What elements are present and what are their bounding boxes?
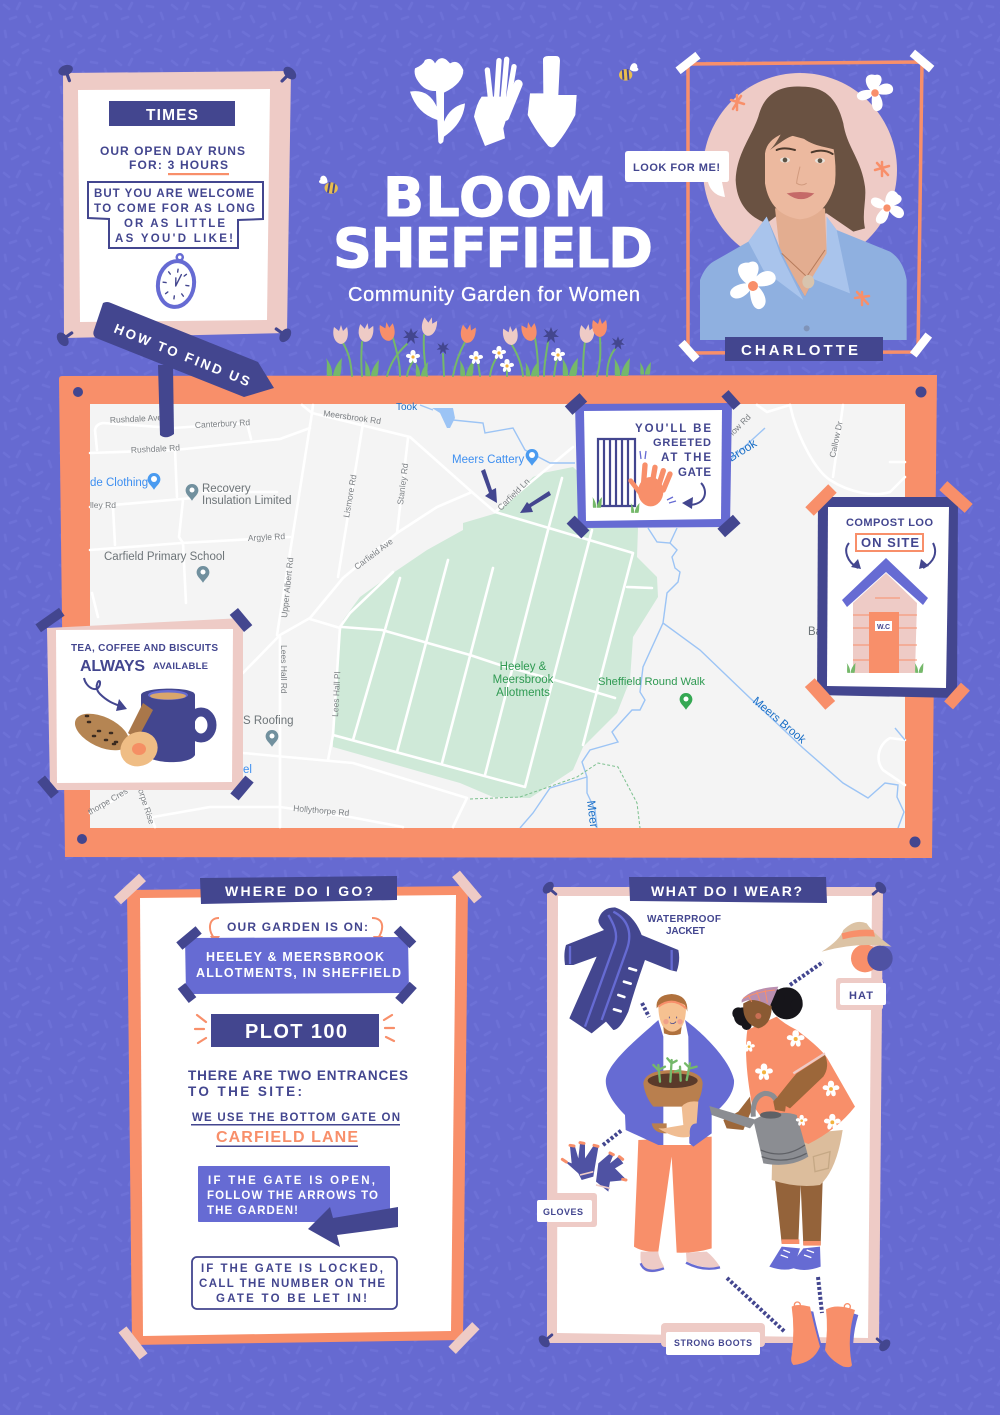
dotted connectors <box>603 962 823 1332</box>
icon: biscuits <box>69 703 163 772</box>
icon: stopwatch <box>155 252 198 309</box>
title: SHEFFIELD <box>333 217 653 280</box>
icon: jacket <box>564 907 679 1033</box>
map: labels: S Roofing <box>243 715 294 727</box>
label: hat <box>836 978 886 1010</box>
panel: portrait <box>625 50 934 362</box>
signpost: how to find us: HOW TO FIND US <box>112 321 252 389</box>
gate locked box: IF THE GATE IS LOCKED, <box>201 1263 383 1275</box>
map: labels: Lees Hall Pl <box>330 671 342 717</box>
arrow <box>308 1207 398 1247</box>
label: waterproof jacket: JACKET <box>666 926 705 937</box>
name label: CHARLOTTE <box>741 342 858 359</box>
illustration: man with pot <box>606 994 734 1272</box>
icon: curly arrow <box>84 678 127 711</box>
garden is on: OUR GARDEN IS ON: <box>227 920 368 934</box>
title: BLOOM <box>383 166 607 229</box>
card: compost loo <box>805 481 973 710</box>
speech bubble <box>625 151 729 197</box>
label: strong boots: STRONG BOOTS <box>674 1338 752 1348</box>
bottom gate text: CARFIELD LANE <box>216 1129 358 1146</box>
map: labels: Heeley & <box>500 661 547 673</box>
two entrances text <box>188 1068 408 1099</box>
icon: mug <box>141 689 212 762</box>
map: labels: Took <box>396 402 418 413</box>
biscuit text <box>71 643 218 675</box>
map: labels: Argyle Rd <box>248 531 286 543</box>
map: labels: Carfield Primary School <box>104 551 225 563</box>
map: labels: Allotments <box>496 687 550 699</box>
address box: ALLOTMENTS, IN SHEFFIELD <box>196 966 401 980</box>
flower border <box>326 315 651 376</box>
gate text: YOU'LL BE <box>635 423 711 435</box>
gate text: GATE <box>678 467 711 479</box>
title icons: flower, hand, trowel <box>410 56 577 147</box>
card: gate <box>565 390 741 538</box>
times heading: TIMES <box>146 107 198 124</box>
map: labels: thorpe Cres <box>86 786 129 817</box>
label: gloves <box>537 1193 597 1227</box>
open day text <box>100 144 245 175</box>
plot label: PLOT 100 <box>245 1021 347 1043</box>
map: labels: low Rd <box>727 412 753 437</box>
two entrances text: TO THE SITE: <box>188 1084 302 1099</box>
icon: waving hand <box>631 465 670 506</box>
panel: times <box>54 63 299 348</box>
map: labels: Insulation Limited <box>202 495 292 507</box>
icon: hat <box>822 922 893 972</box>
map: labels: de Clothing <box>90 477 148 489</box>
gate open box: THE GARDEN! <box>207 1205 298 1217</box>
gate locked box <box>192 1257 397 1309</box>
gate locked box: CALL THE NUMBER ON THE <box>199 1278 385 1290</box>
bottom gate text <box>191 1112 400 1147</box>
map: labels: Meersbrook <box>493 674 554 686</box>
tape corners <box>176 926 417 1004</box>
tape corners <box>114 871 482 1360</box>
icon: arrows <box>846 543 935 569</box>
arrows on map <box>481 469 551 513</box>
pins <box>536 880 893 1353</box>
biscuit text: TEA, COFFEE AND BISCUITS <box>71 643 218 654</box>
map: labels <box>86 402 845 829</box>
gate locked box: GATE TO BE LET IN! <box>216 1293 367 1305</box>
icon: pins <box>54 63 299 348</box>
tape corners <box>805 481 973 710</box>
label: gloves: GLOVES <box>543 1207 583 1217</box>
map: labels: Recovery <box>202 483 251 495</box>
map: labels: Rushdale Rd <box>131 442 180 455</box>
panel: map board <box>59 375 937 858</box>
ticks and grass <box>592 451 676 513</box>
heading: WHAT DO I WEAR? <box>651 883 802 899</box>
tape corners <box>675 50 934 362</box>
signpost: how to find us <box>93 302 274 437</box>
icon: gate <box>598 439 635 506</box>
icon: bees <box>315 62 641 198</box>
map: labels: el <box>243 764 252 776</box>
map: labels: Canterbury Rd <box>195 417 251 430</box>
map: labels: Brook <box>725 436 760 465</box>
map: labels: Meersbrook Rd <box>323 408 382 426</box>
decorative nails <box>73 386 926 848</box>
loo text: COMPOST LOO <box>846 517 933 529</box>
map: streams <box>420 405 905 828</box>
illustration: woman with watering can <box>709 987 855 1270</box>
card: tea and biscuits <box>35 608 254 800</box>
plot label <box>195 1014 394 1047</box>
map: labels: Carfield Ave <box>352 536 395 572</box>
photo: charlotte <box>700 87 907 340</box>
subtitle: Community Garden for Women <box>348 284 640 306</box>
speech bubble: LOOK FOR ME! <box>633 162 720 174</box>
heading <box>629 877 827 903</box>
welcome box <box>88 182 263 248</box>
label: waterproof jacket <box>647 914 721 937</box>
panel: where do i go <box>114 871 482 1360</box>
map: labels: Ba <box>808 626 823 638</box>
map: labels: Upper Albert Rd <box>279 557 295 618</box>
label: waterproof jacket: WATERPROOF <box>647 914 721 925</box>
map: labels: Callow Dr <box>827 420 845 458</box>
welcome box: TO COME FOR AS LONG <box>94 203 255 215</box>
bottom gate text: WE USE THE BOTTOM GATE ON <box>192 1112 400 1124</box>
icon: shed <box>842 558 928 673</box>
icon: shed: W.C <box>877 624 890 631</box>
icon: boots <box>791 1302 858 1372</box>
illustration group <box>562 907 893 1372</box>
welcome box: BUT YOU ARE WELCOME <box>94 188 254 200</box>
map: labels: Meers Brook <box>750 695 808 746</box>
biscuit text: AVAILABLE <box>153 661 208 672</box>
gate open box: FOLLOW THE ARROWS TO <box>207 1190 378 1202</box>
map: allotments area <box>333 467 658 798</box>
map: location pins <box>148 449 692 747</box>
label: hat: HAT <box>849 990 873 1002</box>
panel: what do i wear <box>536 877 893 1372</box>
map: roads <box>90 405 905 827</box>
heading: WHERE DO I GO? <box>225 883 373 899</box>
address box: HEELEY & MEERSBROOK <box>206 950 384 964</box>
icon: trowel <box>528 56 577 147</box>
map: labels: lley Rd <box>90 500 116 510</box>
title <box>333 166 653 280</box>
tape corners <box>565 390 741 538</box>
garden is on <box>210 918 383 944</box>
gate text: AT THE <box>661 452 711 464</box>
gate open box <box>198 1166 398 1247</box>
map: labels: Hollythorpe Rd <box>293 803 350 818</box>
tape corners <box>35 608 254 800</box>
gate open box: IF THE GATE IS OPEN, <box>208 1175 375 1187</box>
welcome box: OR AS LITTLE <box>124 218 225 230</box>
biscuit text: ALWAYS <box>80 658 145 675</box>
map: labels: Sheffield Round Walk <box>598 676 705 688</box>
map: labels: Lees Hall Rd <box>279 645 289 694</box>
label: strong boots <box>661 1323 765 1355</box>
decorative flowers <box>725 75 912 314</box>
icon: hand <box>474 59 518 146</box>
two entrances text: THERE ARE TWO ENTRANCES <box>188 1068 408 1083</box>
icon: flower <box>410 58 465 144</box>
map: labels: Carfield Ln <box>495 476 532 512</box>
open day text: OUR OPEN DAY RUNS <box>100 144 245 158</box>
gate text: GREETED <box>653 437 711 449</box>
icon: curved arrow <box>688 483 705 505</box>
map: labels: Meer <box>584 800 601 829</box>
map: labels: Lismore Rd <box>341 474 359 518</box>
name label <box>725 337 883 361</box>
map: labels: Meers Cattery <box>452 454 524 466</box>
heading <box>200 876 397 904</box>
open day text: FOR: 3 HOURS <box>129 158 228 172</box>
welcome box: AS YOU'D LIKE! <box>115 233 233 245</box>
map: labels: Stanley Rd <box>395 462 410 505</box>
icon: gloves <box>562 1143 627 1192</box>
gate text <box>635 423 711 479</box>
map: labels: Rushdale Ave <box>110 412 163 425</box>
on site label: ON SITE <box>861 535 919 550</box>
times heading <box>109 101 235 126</box>
address box <box>176 926 417 1004</box>
map: labels: orpe Rise <box>136 788 157 825</box>
